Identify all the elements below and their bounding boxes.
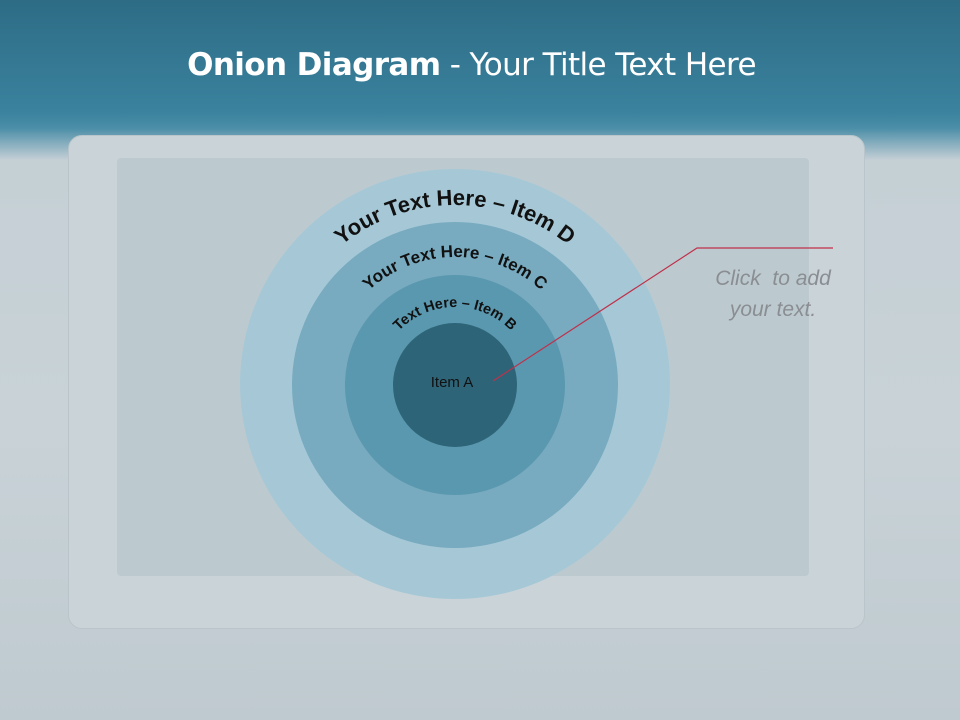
callout line [493, 248, 833, 381]
layer C [292, 222, 618, 548]
background tablet [68, 135, 865, 629]
layer D [240, 169, 670, 599]
layer C: Your Text Here – Item C [361, 245, 547, 288]
layer B: Text Here – Item B [392, 299, 516, 330]
callout text: Click to add [715, 267, 831, 290]
callout text [715, 267, 832, 321]
layer B [345, 275, 565, 495]
callout text: your text. [730, 298, 816, 321]
layer A [393, 323, 517, 447]
tablet screen [117, 158, 809, 576]
layer D: Your Text Here – Item D [332, 190, 574, 242]
layer A: Item A [431, 374, 473, 391]
title: Onion Diagram - Your Title Text Here [187, 47, 756, 83]
header band [0, 0, 960, 160]
